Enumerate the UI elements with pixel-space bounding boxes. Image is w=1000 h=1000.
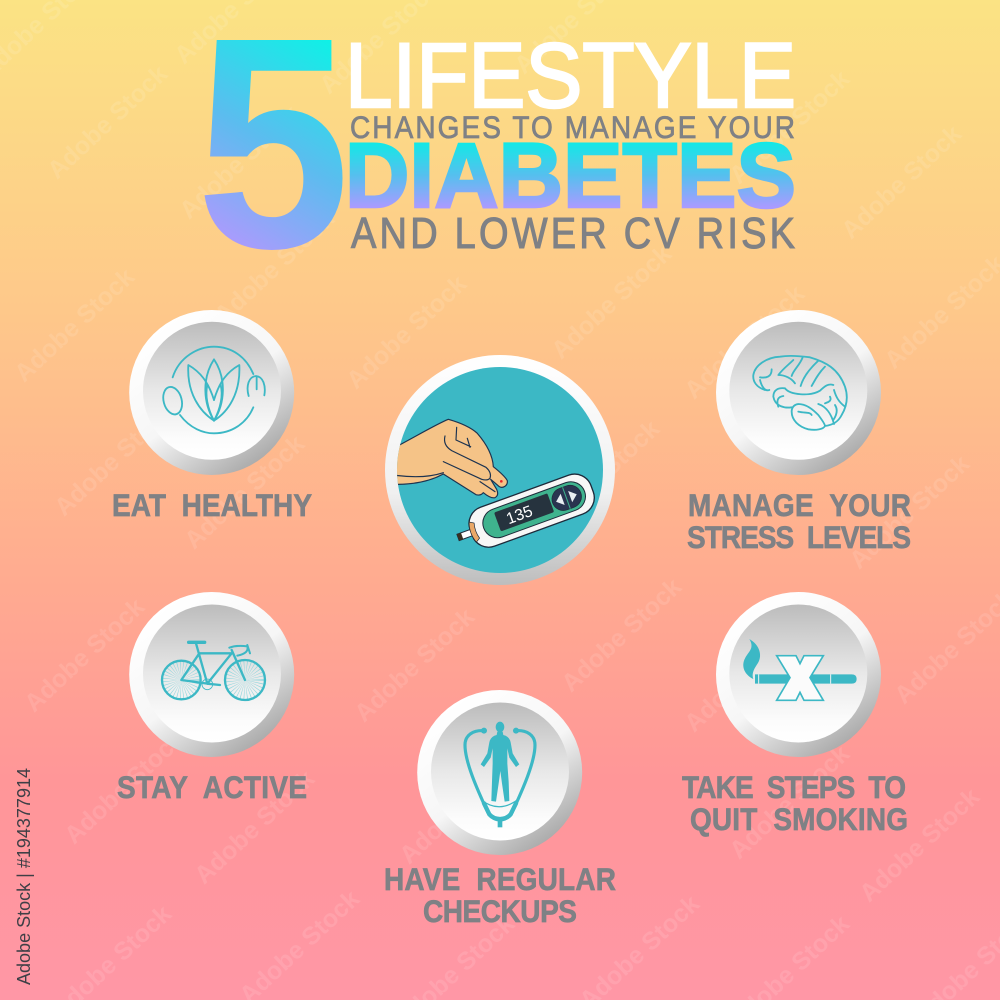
teal disc bbox=[397, 367, 603, 573]
icon: leaves with spoon and fork bbox=[160, 347, 265, 433]
panel: stay active bbox=[117, 592, 307, 805]
meter ring bbox=[385, 355, 615, 585]
watermarks: Adobe Stock bbox=[854, 783, 985, 907]
cigarette bbox=[755, 674, 857, 684]
button bbox=[129, 592, 294, 757]
heading: and lower cv risk: AND LOWER CV RISK bbox=[351, 209, 795, 258]
label bbox=[682, 770, 908, 837]
title bbox=[196, 0, 796, 311]
reading: 135 bbox=[504, 503, 535, 528]
watermarks: Adobe Stock bbox=[42, 60, 173, 184]
screen bbox=[494, 493, 554, 531]
label: STRESS LEVELS bbox=[687, 520, 911, 555]
icon: hand bbox=[393, 419, 507, 498]
green panel bbox=[479, 478, 590, 542]
icon: no smoking bbox=[743, 639, 857, 700]
watermarks: Adobe Stock bbox=[209, 205, 340, 329]
panel: manage stress bbox=[687, 310, 911, 555]
watermarks: Adobe Stock bbox=[534, 415, 665, 539]
button bbox=[716, 592, 881, 757]
test strip bbox=[457, 529, 475, 541]
button bbox=[129, 310, 294, 475]
panel: central glucose meter bbox=[385, 355, 615, 585]
stock id side text: Adobe Stock | #194377914 bbox=[14, 768, 34, 985]
label bbox=[384, 862, 616, 929]
watermarks: Adobe Stock bbox=[836, 120, 967, 244]
label: QUIT SMOKING bbox=[690, 802, 908, 837]
cross bbox=[777, 656, 823, 700]
watermarks: Adobe Stock bbox=[179, 430, 310, 554]
label: MANAGE YOUR bbox=[688, 488, 911, 523]
watermarks: Adobe Stock bbox=[59, 725, 190, 849]
watermarks: Adobe Stock bbox=[679, 613, 810, 737]
watermarks: Adobe Stock bbox=[349, 603, 480, 727]
watermarks: Adobe Stock bbox=[9, 263, 140, 387]
buttons bbox=[549, 482, 585, 514]
watermarks: Adobe Stock bbox=[546, 240, 677, 364]
label: STAY ACTIVE bbox=[117, 770, 307, 805]
watermarks: Adobe Stock bbox=[341, 270, 472, 394]
button bbox=[716, 310, 881, 475]
heading: lifestyle: LIFESTYLE bbox=[345, 25, 796, 127]
watermarks: Adobe Stock bbox=[844, 450, 975, 574]
label bbox=[687, 488, 911, 555]
label: CHECKUPS bbox=[423, 894, 577, 929]
panel: quit smoking bbox=[682, 592, 908, 837]
heading: diabetes: DIABETES bbox=[345, 125, 796, 227]
label: HAVE REGULAR bbox=[384, 862, 616, 897]
label: EAT HEALTHY bbox=[112, 488, 312, 523]
icon: glucose meter bbox=[451, 469, 599, 557]
watermarks: Adobe Stock bbox=[394, 745, 525, 869]
heading: changes to manage your: CHANGES TO MANAGE YOUR bbox=[350, 110, 795, 145]
button bbox=[417, 690, 582, 855]
watermarks: Adobe Stock bbox=[556, 573, 687, 697]
meter body bbox=[464, 469, 599, 552]
watermarks: Adobe Stock bbox=[724, 65, 855, 189]
smoke bbox=[743, 639, 760, 679]
watermarks: Adobe Stock bbox=[189, 765, 320, 889]
icon: bicycle bbox=[162, 642, 265, 700]
watermarks: Adobe Stock bbox=[724, 740, 855, 864]
watermarks: Adobe Stock bbox=[679, 280, 810, 404]
watermarks: Adobe Stock bbox=[49, 397, 180, 521]
panel: eat healthy bbox=[112, 310, 312, 523]
watermarks: Adobe Stock bbox=[174, 100, 305, 224]
watermarks: Adobe Stock bbox=[19, 593, 150, 717]
label: TAKE STEPS TO bbox=[682, 770, 906, 805]
icon: stethoscope and body bbox=[465, 722, 535, 827]
icon: brain bbox=[753, 356, 847, 430]
panel: regular checkups bbox=[384, 690, 616, 929]
